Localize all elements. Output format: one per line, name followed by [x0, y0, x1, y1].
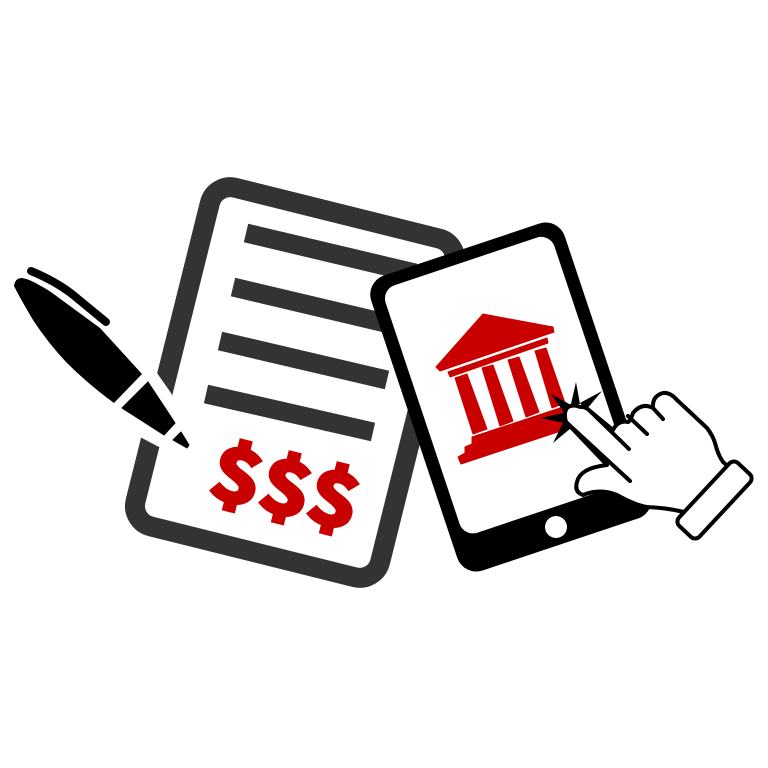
- pen: [14, 271, 190, 450]
- document sheet: [131, 183, 459, 582]
- bank building icon: [436, 314, 570, 464]
- document with lines and dollar signs: [131, 183, 459, 582]
- click burst: [541, 382, 602, 443]
- pen notch: [27, 277, 40, 283]
- pen clip: [31, 271, 106, 322]
- finger lines: [566, 408, 663, 481]
- pen barrel: [14, 278, 142, 403]
- tablet body: [365, 217, 657, 577]
- dollar signs: $: [299, 438, 372, 551]
- dollar signs: [202, 415, 372, 551]
- pen clip slit: [58, 294, 101, 326]
- home button: [545, 516, 567, 538]
- hand outline: [565, 393, 735, 522]
- dollar signs: $: [202, 415, 275, 528]
- gap cut in the document around the pen: [118, 373, 190, 450]
- hand pointing at the screen: [565, 393, 754, 541]
- roof: [436, 314, 554, 371]
- tablet screen: [381, 233, 633, 537]
- pen grip: [122, 382, 175, 435]
- text lines on document: [206, 233, 415, 432]
- pen tip: [173, 432, 189, 448]
- base: [458, 407, 570, 464]
- columns: [455, 348, 565, 434]
- shirt cuff: [675, 459, 754, 541]
- beam: [448, 338, 548, 377]
- tablet: [365, 217, 657, 577]
- dollar signs: $: [251, 427, 324, 540]
